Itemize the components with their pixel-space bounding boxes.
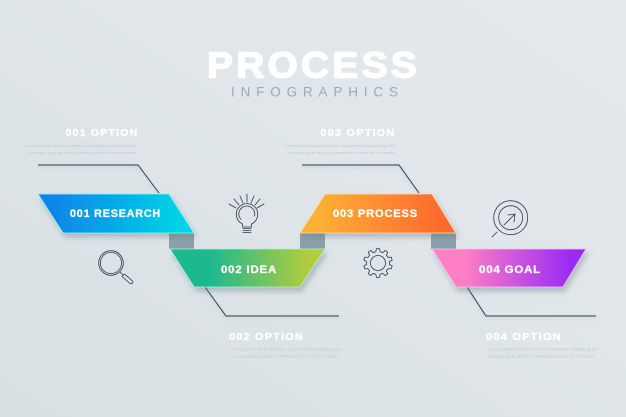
option 4 text: Lorem ipsum dolor sit amet, consectetur adipiscing elit.: [487, 348, 599, 352]
banner: 001 research: [38, 194, 194, 233]
option 2 text: [229, 331, 342, 358]
connector 2: [300, 233, 325, 249]
title: PROCESS: [207, 44, 420, 86]
banner: 004 goal: 004 GOAL: [479, 264, 541, 276]
option 4 text: Sed quis justo at dolor commodo viverra vel in mauris.: [487, 354, 596, 358]
icon: light bulb: [229, 194, 264, 232]
option 4 text: [486, 331, 599, 358]
option 2 text: Lorem ipsum dolor sit amet, consectetur adipiscing elit.: [230, 348, 342, 352]
option 2 text: Sed quis justo at dolor commodo viverra vel in mauris.: [230, 354, 339, 358]
banner: 003 process: 003 PROCESS: [333, 208, 418, 220]
icon: gear: [364, 249, 392, 277]
option 1 text: 001 OPTION: [66, 127, 138, 139]
leader line 4: [467, 287, 596, 316]
leader line 1: [38, 165, 159, 193]
banner: 001 research: 001 RESEARCH: [70, 208, 161, 220]
connector 1: [169, 233, 194, 249]
icon: magnifying glass: [99, 251, 133, 284]
option 3 text: [284, 127, 396, 155]
banner: 002 idea: [170, 249, 325, 287]
banner: 003 process: [300, 194, 456, 233]
connector 3: [431, 233, 456, 249]
option 3 text: Lorem ipsum dolor sit amet, consectetur adipiscing elit.: [284, 144, 396, 148]
option 4 text: 004 OPTION: [486, 331, 562, 343]
banner: 002 idea: 002 IDEA: [221, 264, 277, 276]
leader line 3: [302, 165, 419, 193]
option 3 text: Sed quis justo at dolor commodo viverra vel in mauris.: [287, 151, 396, 155]
banner: 004 goal: [432, 249, 586, 287]
leader line 2: [205, 287, 339, 316]
option 1 text: Lorem ipsum dolor sit amet, consectetur adipiscing elit.: [25, 144, 138, 148]
option 3 text: 003 OPTION: [320, 127, 396, 139]
option 2 text: 002 OPTION: [229, 331, 304, 343]
subtitle: INFOGRAPHICS: [231, 84, 398, 100]
icon: target with arrow: [492, 201, 528, 237]
option 1 text: Sed quis justo at dolor commodo viverra vel in mauris.: [29, 151, 138, 155]
option 1 text: [25, 127, 138, 155]
